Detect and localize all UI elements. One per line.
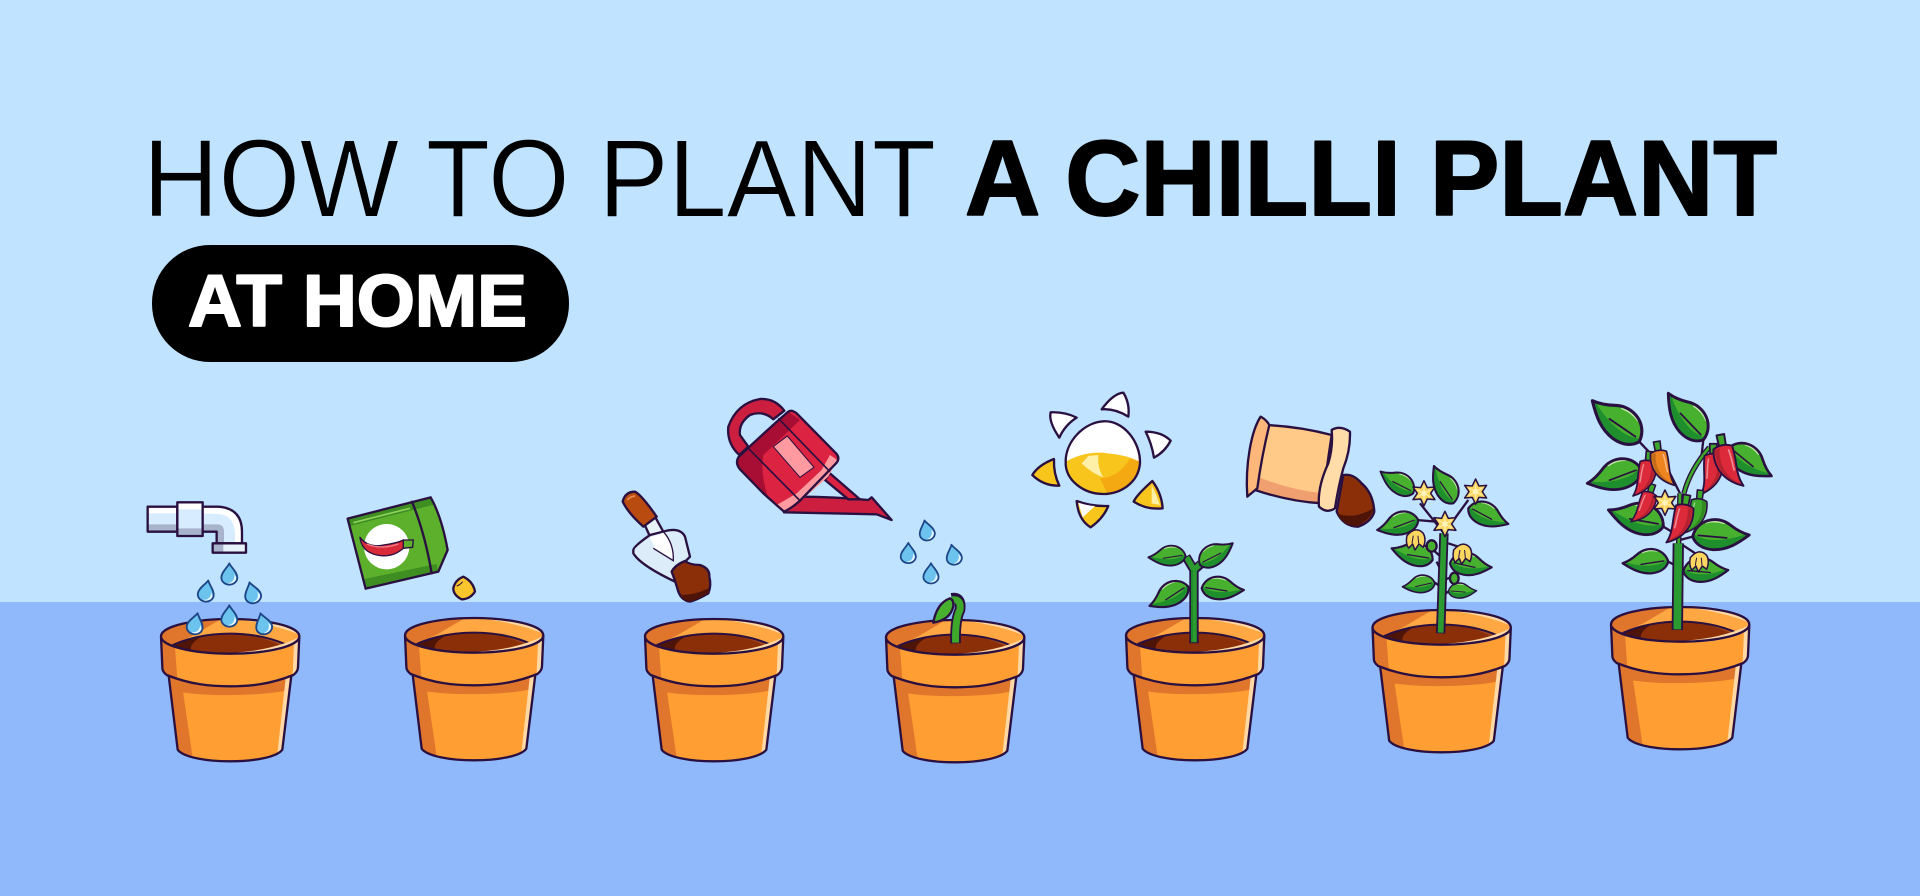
plant: flowering: [1374, 460, 1513, 633]
icon: watering can: [728, 399, 963, 583]
background floor: [0, 602, 1920, 896]
icon: sprout: [933, 598, 960, 643]
step 1 pot: [161, 619, 299, 761]
icon: water tap with drops: [148, 502, 274, 636]
step 6 pot: [1373, 610, 1511, 752]
step 3 pot: [645, 619, 783, 761]
background wall: [0, 0, 1920, 602]
plant: young seedling: [1144, 534, 1244, 643]
badge: at home: [152, 245, 569, 362]
icon: trowel with soil: [623, 492, 710, 602]
title light part: HOW TO PLANT: [143, 118, 936, 240]
icon: sun: [1032, 393, 1171, 527]
step 7 pot: [1611, 607, 1749, 749]
title bold part: A CHILLI PLANT: [965, 118, 1777, 238]
step 2 pot: [405, 618, 543, 760]
plant: fruiting chilli: [1582, 383, 1780, 630]
step 4 pot: [886, 620, 1024, 762]
icon: fertiliser sack: [1247, 417, 1374, 527]
icon: seed packet with seed: [348, 497, 475, 599]
step 5 pot: [1126, 618, 1264, 760]
badge: at home: AT HOME: [188, 261, 527, 342]
title: [143, 118, 1777, 240]
